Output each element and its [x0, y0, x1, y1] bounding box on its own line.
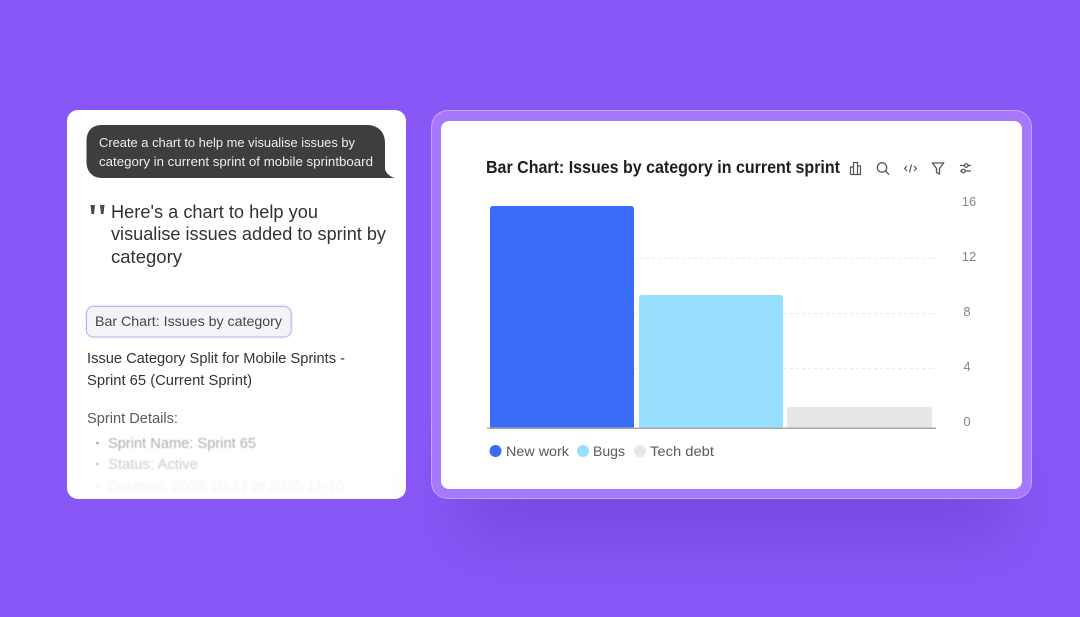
y axis labels: 4 — [963, 359, 971, 374]
bar chart — [487, 194, 976, 429]
text: issue category summary: Issue Category Split for Mobile Sprints - — [87, 351, 345, 367]
y axis labels: 0 — [963, 414, 971, 429]
icon: search — [877, 163, 889, 174]
assistant reply heading: category — [111, 247, 182, 267]
legend: Tech debt — [650, 443, 714, 459]
text: sprint details: Duration: 2025-10-27 to 2025-11-10 — [108, 479, 344, 495]
user prompt bubble — [86, 125, 395, 178]
chip: bar chart reference — [85, 304, 293, 338]
chart title: Bar Chart: Issues by category in current sprint — [486, 157, 840, 177]
panel: chat conversation — [67, 110, 406, 499]
x axis — [487, 427, 936, 429]
bar: new work — [490, 206, 634, 428]
y axis labels: 8 — [963, 304, 971, 319]
panel: chart card — [441, 121, 1022, 489]
icon: quote marks — [90, 205, 104, 214]
text: sprint details — [87, 411, 344, 495]
chip: bar chart reference: Bar Chart: Issues by category — [95, 313, 282, 329]
legend: New work — [506, 443, 570, 459]
text: issue category summary — [87, 351, 345, 389]
panel: chart shadow — [460, 460, 1010, 540]
text: sprint details: Sprint Name: Sprint 65 — [108, 436, 256, 452]
assistant reply heading — [111, 202, 386, 267]
panel: chart card frame — [431, 110, 1032, 499]
text: sprint details: Status: Active — [108, 457, 198, 473]
icon: bar chart — [850, 162, 860, 174]
text: sprint details: Sprint Details: — [87, 411, 178, 427]
y axis labels: 16 — [962, 194, 976, 209]
icon: sliders — [960, 164, 971, 173]
legend: Bugs — [593, 443, 625, 459]
bar: bugs — [639, 295, 783, 428]
legend — [490, 443, 714, 459]
text: issue category summary: Sprint 65 (Current Sprint) — [87, 373, 252, 389]
icon: filter — [932, 163, 944, 174]
assistant reply heading: Here's a chart to help you — [111, 202, 318, 222]
bar: tech debt — [787, 407, 932, 428]
icon: code — [904, 164, 916, 172]
assistant reply heading: visualise issues added to sprint by — [111, 224, 386, 244]
user prompt bubble: category in current sprint of mobile sprintboard — [99, 154, 373, 169]
user prompt bubble: Create a chart to help me visualise issues by — [99, 135, 355, 150]
y axis labels: 12 — [962, 249, 976, 264]
y axis labels — [962, 194, 976, 429]
